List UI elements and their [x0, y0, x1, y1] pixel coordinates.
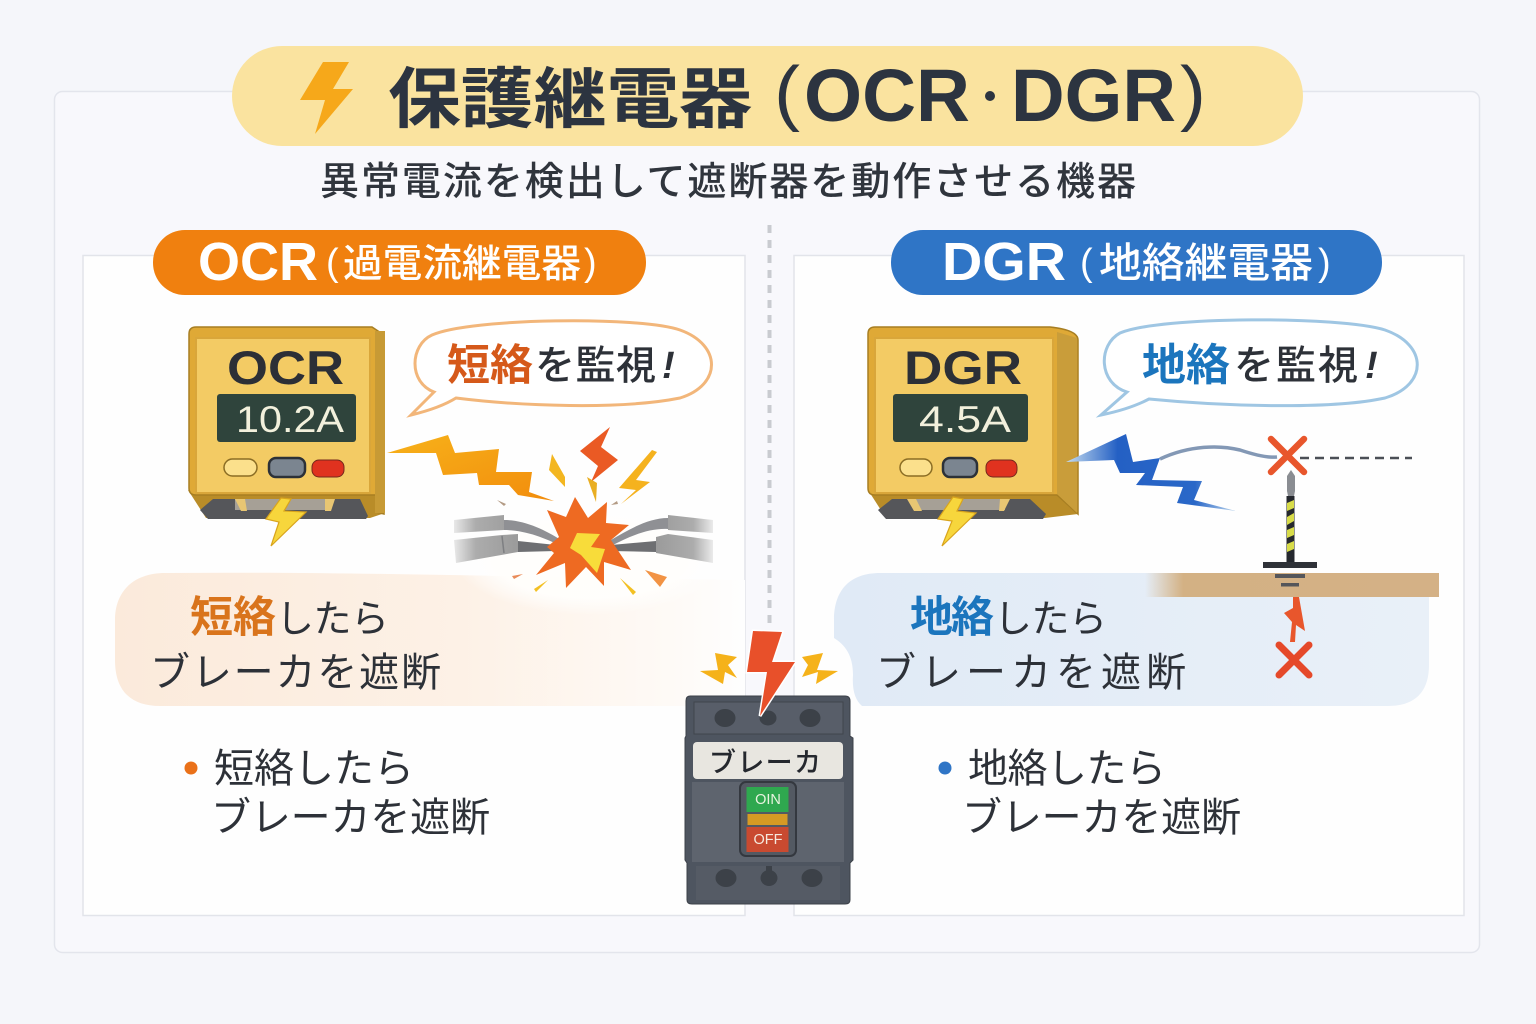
icon: orange lightning to cable: [387, 435, 554, 501]
subtitle: 異常電流を検出して遮断器を動作させる機器: [320, 161, 1136, 204]
OCR card: [83, 256, 745, 916]
icon: red cross lower: [1279, 645, 1309, 675]
DGR heading pill: [891, 230, 1382, 295]
panel: DGR action band: 地絡: [910, 594, 994, 642]
title text: [388, 53, 1206, 137]
DGR bullet text: ブレーカを遮断: [962, 796, 1241, 840]
breaker: [685, 631, 853, 904]
title text: OCR: [804, 54, 970, 137]
icon: breaker yellow bolts: [700, 653, 838, 684]
OCR bullet text: ブレーカを遮断: [211, 796, 490, 840]
speech bubble: short circuit: [411, 321, 712, 415]
DGR relay device: [868, 327, 1078, 546]
panel: DGR action band: したら: [994, 599, 1107, 641]
panel: OCR action band: ブレーカを遮断: [150, 651, 441, 695]
title text: ): [1180, 53, 1206, 133]
title banner: [232, 46, 1303, 146]
icon: ground rod: [1263, 470, 1317, 568]
OCR heading pill: ): [584, 242, 597, 284]
icon: breaker red bolt: [747, 631, 795, 716]
icon: red spark underground: [1284, 597, 1305, 642]
title text: DGR: [1011, 54, 1176, 137]
OCR heading pill: 過電流継電器: [343, 243, 581, 286]
OCR relay device: 10.2A: [236, 399, 344, 440]
OCR heading pill: OCR: [198, 232, 318, 292]
breaker switch: OIN: [755, 792, 781, 808]
title text: 保護継電器: [388, 62, 752, 136]
soil strip: [1145, 573, 1439, 597]
breaker label: ブレーカ: [709, 748, 821, 778]
DGR heading pill: DGR: [942, 232, 1066, 292]
DGR bullet text: [938, 747, 1241, 840]
OCR relay device: [188, 327, 385, 546]
breaker label: [693, 742, 843, 779]
panel: OCR action band: [115, 573, 745, 706]
DGR card: [794, 256, 1464, 916]
DGR heading pill: 地絡継電器: [1099, 240, 1313, 286]
OCR bullet text: 短絡したら: [214, 747, 414, 791]
breaker terminal holes: [714, 709, 822, 887]
title text: (: [774, 53, 800, 133]
panel: DGR: [794, 230, 1464, 916]
OCR bullet text: [184, 747, 490, 840]
speech bubble: ground fault: [1101, 320, 1417, 415]
panel: DGR action band: ブレーカを遮断: [876, 651, 1186, 695]
icon: title lightning bolt: [300, 62, 353, 134]
breaker switch: OFF: [754, 832, 783, 848]
dashed line: [1300, 457, 1412, 459]
OCR relay device: OCR: [227, 341, 344, 394]
panel: OCR action band: したら: [276, 599, 389, 641]
DGR heading pill: ): [1318, 242, 1331, 284]
DGR heading pill: (: [1080, 242, 1093, 284]
OCR heading pill: [153, 230, 646, 295]
speech bubble: ground fault: を監視: [1234, 344, 1358, 388]
DGR bullet text: 地絡したら: [968, 747, 1166, 791]
speech bubble: short circuit: !: [662, 345, 675, 387]
ground fault wire: [1160, 447, 1277, 459]
speech bubble: short circuit: を監視: [535, 344, 656, 388]
speech bubble: ground fault: 地絡: [1142, 341, 1230, 390]
breaker switch: [740, 782, 796, 856]
icon: blue lightning: [1066, 434, 1236, 511]
outer panel: [54, 92, 1480, 952]
DGR relay device: 4.5A: [919, 399, 1011, 440]
panel: OCR action band: 短絡: [190, 594, 276, 642]
OCR heading pill: (: [326, 242, 339, 284]
center dashed divider: [768, 225, 772, 625]
icon: relay bolt: [938, 497, 976, 546]
panel: OCR: [83, 230, 745, 916]
speech bubble: short circuit: 短絡: [447, 342, 533, 390]
icon: relay bolt: [266, 498, 306, 546]
icon: red cross upper: [1271, 439, 1304, 472]
icon: explosion with cables: [454, 427, 725, 615]
speech bubble: ground fault: !: [1365, 345, 1378, 387]
panel: DGR action band: [834, 573, 1429, 706]
DGR relay device: DGR: [904, 341, 1022, 394]
